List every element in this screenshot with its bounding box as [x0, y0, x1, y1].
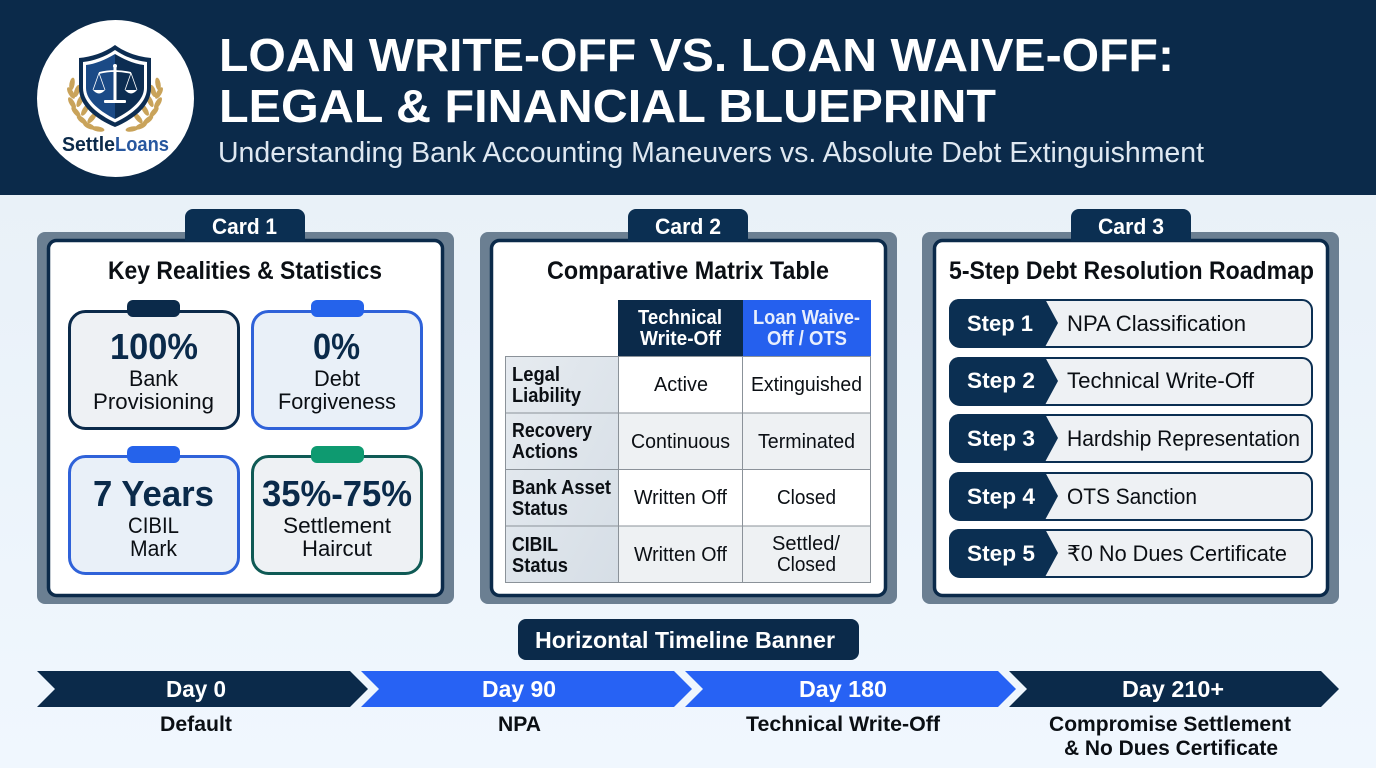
- row: CIBIL status: Closed: [777, 554, 836, 576]
- step 3: Hardship Representation: [1067, 426, 1300, 451]
- step 1: Step 1: [967, 311, 1033, 336]
- row: bank asset status: Status: [512, 498, 568, 520]
- row: bank asset status: Closed: [777, 487, 836, 509]
- subtitle: Understanding Bank Accounting Maneuvers vs. Absolute Debt Extinguishment: [218, 137, 1204, 169]
- stat: 0% debt forgiveness: [252, 300, 422, 428]
- row: CIBIL status: Written Off: [634, 544, 727, 566]
- stat: 7 years CIBIL mark: Mark: [130, 536, 178, 561]
- card 2 heading: Comparative Matrix Table: [547, 257, 829, 285]
- stat: 35%-75% settlement haircut: Settlement: [283, 513, 391, 538]
- timeline: day 0: Day 0: [166, 676, 226, 702]
- panel: card 2 comparative matrix: [480, 209, 897, 604]
- row: recovery actions: Continuous: [631, 431, 730, 453]
- timeline: day 0: Default: [160, 713, 232, 736]
- step 2: Technical Write-Off: [1067, 368, 1255, 393]
- column headers: Loan Waive-: [753, 307, 860, 329]
- card 3 tab: [1071, 209, 1191, 241]
- timeline: day 180: Day 180: [799, 676, 887, 702]
- row: CIBIL status: Status: [512, 555, 568, 577]
- timeline: day 210+: & No Dues Certificate: [1064, 737, 1278, 760]
- stat: 7 years CIBIL mark: 7 Years: [93, 473, 214, 514]
- card 1 tab: Card 1: [212, 214, 277, 239]
- card 2 tab: Card 2: [655, 214, 721, 239]
- comparison table: [506, 300, 871, 582]
- timeline banner label: [518, 619, 859, 660]
- row: legal liability: Active: [654, 374, 708, 396]
- card 1 tab: [185, 209, 305, 241]
- row: CIBIL status: Settled/: [772, 533, 840, 555]
- row: legal liability: Extinguished: [751, 374, 862, 396]
- timeline: day 210+: Day 210+: [1122, 676, 1224, 702]
- stat: 100% bank provisioning: [70, 300, 238, 428]
- timeline: day 90: NPA: [498, 713, 541, 736]
- row: recovery actions: Actions: [512, 441, 578, 463]
- stat: 7 years CIBIL mark: [70, 446, 238, 574]
- row: CIBIL status: CIBIL: [512, 534, 558, 556]
- timeline: day 180: Technical Write-Off: [746, 713, 941, 736]
- column headers: [638, 307, 860, 350]
- step 1: [949, 299, 1312, 347]
- logo: SettleLoans: [37, 20, 194, 177]
- row: recovery actions: [512, 420, 855, 463]
- icon: laurel left: [65, 77, 105, 133]
- step 4: OTS Sanction: [1067, 484, 1197, 509]
- card 2 tab: [628, 209, 748, 241]
- timeline banner label: Horizontal Timeline Banner: [535, 627, 835, 653]
- title: LOAN WRITE-OFF VS. LOAN WAIVE-OFF:: [219, 29, 1174, 81]
- panel: card 1 key realities: [37, 209, 454, 604]
- timeline: day 210+: [1009, 671, 1339, 760]
- timeline: day 0: [37, 671, 368, 736]
- stat: 0% debt forgiveness: Forgiveness: [278, 389, 396, 414]
- stat: 100% bank provisioning: Bank: [129, 366, 179, 391]
- header banner: [0, 0, 1376, 195]
- timeline: day 210+: Compromise Settlement: [1049, 713, 1291, 736]
- row: recovery actions: Terminated: [758, 431, 855, 453]
- panel: card 3 roadmap: [922, 209, 1339, 604]
- step 4: [949, 472, 1312, 520]
- title: LEGAL & FINANCIAL BLUEPRINT: [219, 80, 996, 132]
- stat: 0% debt forgiveness: Debt: [314, 366, 360, 391]
- title: [219, 29, 1174, 132]
- logo wordmark: Settle: [62, 134, 115, 156]
- row: legal liability: Liability: [512, 385, 582, 407]
- stat: 100% bank provisioning: Provisioning: [93, 389, 214, 414]
- step 3: [949, 414, 1312, 462]
- stat: 35%-75% settlement haircut: [252, 446, 422, 574]
- row: legal liability: Legal: [512, 364, 560, 386]
- row: recovery actions: Recovery: [512, 420, 593, 442]
- stat: 35%-75% settlement haircut: Haircut: [302, 536, 372, 561]
- page background: [0, 195, 1376, 768]
- column headers: Write-Off: [640, 328, 721, 350]
- step 2: Step 2: [967, 368, 1035, 393]
- icon: laurel right: [125, 77, 165, 133]
- stat: 0% debt forgiveness: 0%: [313, 326, 360, 367]
- logo wordmark: [62, 134, 169, 156]
- column headers: Off / OTS: [767, 328, 847, 350]
- stat: 100% bank provisioning: 100%: [110, 326, 198, 367]
- stat: 7 years CIBIL mark: CIBIL: [128, 513, 179, 538]
- row: legal liability: [512, 364, 862, 407]
- timeline: day 180: [685, 671, 1016, 736]
- step 5: [949, 529, 1312, 577]
- icon: shield with scales: [79, 45, 151, 127]
- row: bank asset status: Written Off: [634, 487, 727, 509]
- step 5: ₹0 No Dues Certificate: [1067, 541, 1287, 566]
- card 3 tab: Card 3: [1098, 214, 1164, 239]
- row: bank asset status: [512, 477, 836, 520]
- timeline: day 90: Day 90: [482, 676, 556, 702]
- row: CIBIL status: [512, 533, 840, 577]
- step 4: Step 4: [967, 484, 1036, 509]
- card 1 heading: Key Realities & Statistics: [108, 257, 382, 285]
- step 2: [949, 357, 1312, 405]
- timeline: day 90: [361, 671, 692, 736]
- step 1: NPA Classification: [1067, 311, 1246, 336]
- card 3 heading: 5-Step Debt Resolution Roadmap: [949, 257, 1314, 285]
- logo wordmark: Loans: [115, 134, 169, 156]
- column headers: Technical: [638, 307, 722, 329]
- step 5: Step 5: [967, 541, 1035, 566]
- step 3: Step 3: [967, 426, 1035, 451]
- row: bank asset status: Bank Asset: [512, 477, 611, 499]
- stat: 35%-75% settlement haircut: 35%-75%: [262, 473, 412, 514]
